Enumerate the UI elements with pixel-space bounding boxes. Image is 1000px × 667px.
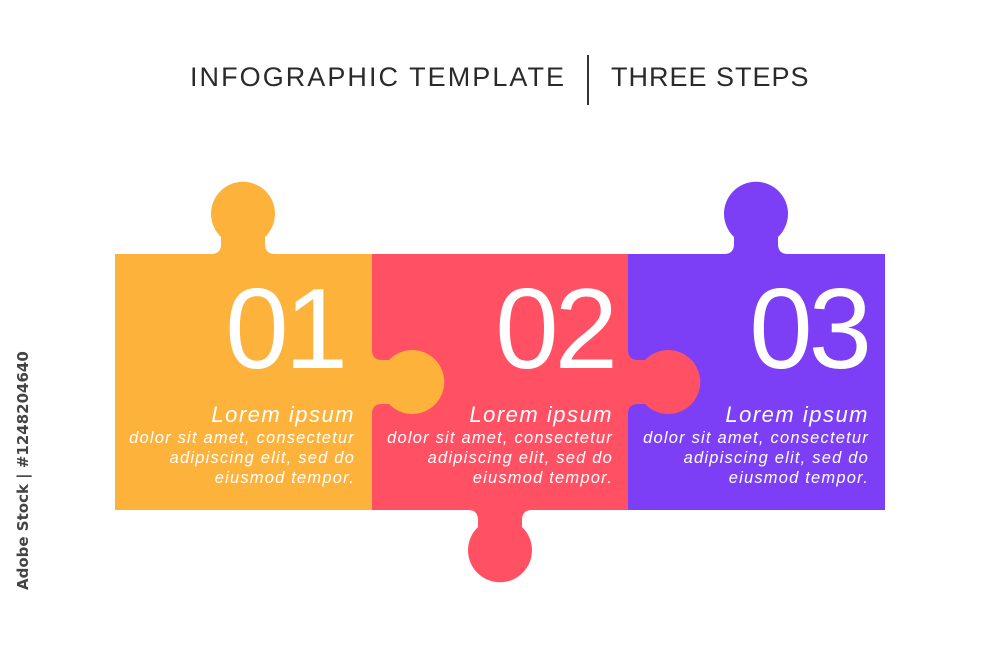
step 1 text: adipiscing elit, sed do	[170, 449, 355, 467]
step 2 text: eiusmod tempor.	[473, 469, 613, 487]
step 1 text: 01	[225, 266, 344, 393]
step 3 text: adipiscing elit, sed do	[684, 449, 869, 467]
step 3 text: 03	[749, 266, 868, 393]
step 3 text	[643, 266, 869, 487]
title: INFOGRAPHIC TEMPLATE	[190, 62, 566, 92]
piece 3	[628, 182, 885, 510]
watermark id: Adobe Stock | #1248204640	[14, 351, 33, 590]
tab 1 into 2	[372, 350, 444, 414]
step 1 text	[129, 266, 355, 487]
step 1 text: Lorem ipsum	[211, 402, 355, 427]
tab 2 into 3	[628, 350, 700, 414]
step 1 text: eiusmod tempor.	[215, 469, 355, 487]
title	[190, 55, 810, 105]
step 2 text: adipiscing elit, sed do	[428, 449, 613, 467]
step 2 text: Lorem ipsum	[469, 402, 613, 427]
step 3 text: dolor sit amet, consectetur	[643, 429, 869, 447]
step 1 text: dolor sit amet, consectetur	[129, 429, 355, 447]
title: THREE STEPS	[611, 62, 810, 92]
step 2 text: dolor sit amet, consectetur	[387, 429, 613, 447]
step 3 text: Lorem ipsum	[725, 402, 869, 427]
step 2 text	[387, 266, 614, 487]
step 3 text: eiusmod tempor.	[729, 469, 869, 487]
piece 2	[372, 254, 629, 582]
step 2 text: 02	[495, 266, 614, 393]
piece 1	[115, 182, 373, 510]
